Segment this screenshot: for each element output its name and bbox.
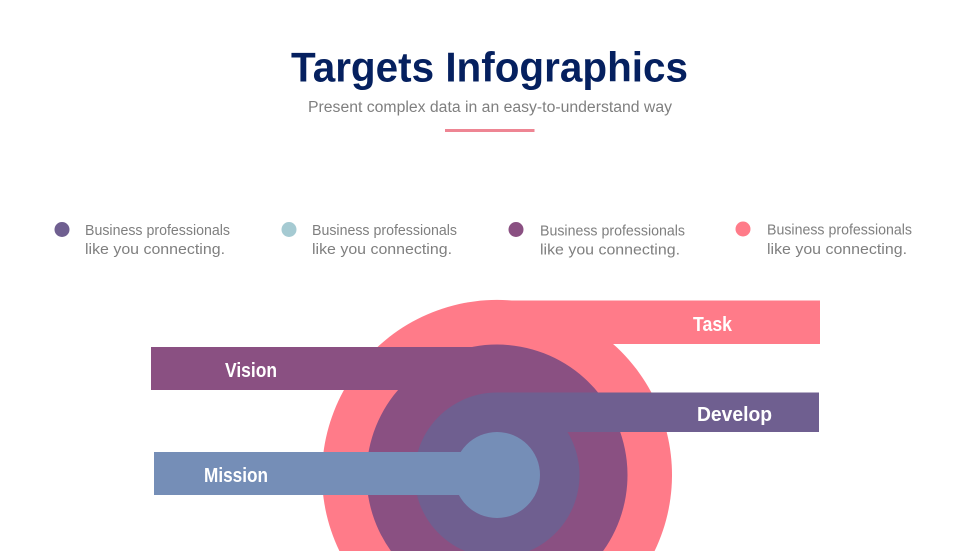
centre and bar: mission: Mission [204,465,268,487]
legend item 4: like you connecting. [767,241,907,258]
legend item 3: Business professionals [540,222,685,240]
ring and bar: vision: Vision [225,360,277,382]
centre and bar: mission [154,432,540,518]
legend item 2 [282,222,457,258]
legend [54,222,912,258]
ring and bar: vision [151,345,628,551]
ring and bar: develop [415,392,819,551]
target chart [151,300,820,551]
legend item 1: Business professionals [85,222,230,239]
title underline [445,129,534,132]
legend item 3: like you connecting. [540,242,680,258]
legend item 4: Business professionals [767,222,912,238]
legend item 2: Business professionals [312,222,457,239]
ring and bar: task: Task [693,314,733,336]
legend item 1: like you connecting. [85,241,225,258]
legend item 3 [508,222,685,258]
title: Targets Infographics [291,44,688,90]
legend item 1 [54,222,230,258]
ring and bar: develop: Develop [697,404,772,426]
ring and bar: task [322,300,820,551]
legend item 4 [736,222,912,258]
subtitle: Present complex data in an easy-to-understand way [308,99,672,116]
legend item 2: like you connecting. [312,241,452,258]
